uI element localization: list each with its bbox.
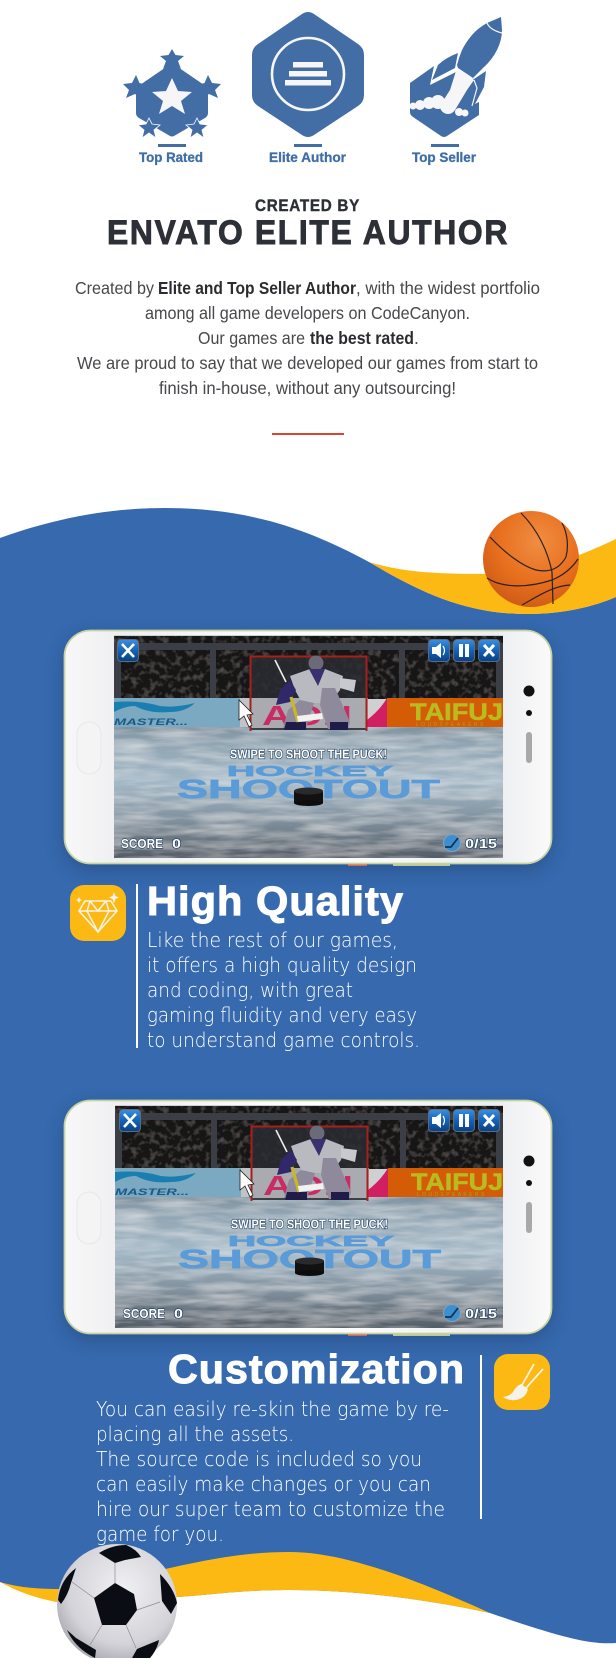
goal frame (252, 1126, 368, 1201)
close button (478, 640, 500, 662)
intro text block: Created by (75, 278, 154, 298)
badge: top seller underline (431, 144, 459, 147)
phone sensor (526, 1180, 532, 1186)
ad text master: MASTER... (114, 717, 188, 727)
phone speaker (526, 732, 532, 763)
phone shadow (64, 1106, 552, 1340)
shots count: 0/15 (465, 1307, 497, 1321)
ice surface (115, 1197, 503, 1328)
top left button (118, 640, 138, 662)
board: middle net ad (240, 698, 368, 728)
puck (295, 1258, 324, 1276)
net lower (252, 1168, 367, 1198)
shots count: 0/15 (465, 837, 497, 851)
divider: high quality (136, 884, 138, 1048)
intro text block: the best rated (310, 328, 414, 348)
board: pink stripe (367, 698, 387, 728)
badge: top rated underline (158, 144, 186, 147)
ad text taifuj: TAIFUJ (410, 699, 503, 726)
label: top seller: Top Seller (412, 150, 477, 165)
badge: top seller rocket (410, 17, 502, 137)
phone body (64, 630, 552, 864)
text: customization (96, 1397, 449, 1546)
net lower (251, 698, 366, 728)
shots icon (444, 834, 460, 852)
text: customization: The source code is included so you (96, 1447, 422, 1471)
score value: 0 (174, 1307, 183, 1321)
ice surface (114, 727, 503, 858)
board: orange ad (387, 698, 503, 728)
ad text loudspeakers: LOUDSPEAKERS (416, 722, 486, 728)
basketball (483, 511, 579, 607)
goal net (251, 657, 366, 730)
pause button (454, 640, 474, 662)
cursor (239, 700, 253, 727)
intro text block: Our games are (198, 328, 305, 348)
phone camera (524, 686, 534, 696)
ice logo hockey: HOCKEY (228, 1233, 394, 1250)
intro text block: finish in-house, without any outsourcing! (159, 378, 456, 398)
phone body (64, 1100, 552, 1334)
intro text block: , with the widest portfolio (356, 278, 540, 298)
ad logo swoosh (114, 702, 195, 712)
label: top rated: Top Rated (139, 150, 203, 165)
phone camera (524, 1156, 534, 1166)
text: high quality (147, 928, 420, 1052)
badge: elite author (252, 12, 364, 137)
ad text on net: AON (262, 700, 352, 731)
phone 2 (64, 1100, 552, 1340)
board: orange ad (388, 1168, 503, 1198)
phone speaker (526, 1202, 532, 1233)
phone shadow (64, 636, 552, 870)
ad logo swoosh (115, 1172, 196, 1182)
badges row (123, 12, 502, 165)
background: yellow wave bottom (0, 1552, 490, 1613)
pause button (454, 1110, 474, 1132)
intro text block: We are proud to say that we developed our games from start to (77, 353, 538, 373)
goal frame (250, 656, 366, 731)
text: high quality: to understand game controls. (147, 1028, 420, 1052)
text: customization: hire our super team to customize the (96, 1497, 445, 1521)
phone 1 (64, 630, 552, 870)
heading: envato elite author: ENVATO ELITE AUTHOR (107, 214, 509, 252)
icon: paint brush (494, 1354, 550, 1410)
ice logo hockey: HOCKEY (227, 763, 393, 780)
ice logo shootout: SHOOTOUT (177, 774, 440, 804)
goalie (275, 656, 356, 730)
ad text on net: AON (263, 1170, 353, 1201)
text: high quality: and coding, with great (147, 978, 353, 1002)
text: high quality: it offers a high quality design (147, 953, 417, 977)
goal net (252, 1127, 367, 1200)
text: customization: placing all the assets. (96, 1422, 294, 1446)
text: high quality: gaming fluidity and very easy (147, 1003, 417, 1027)
score: SCORE (121, 837, 163, 851)
badge: elite author underline (294, 144, 322, 147)
heading: customization: Customization (168, 1346, 465, 1392)
phone sensor (526, 710, 532, 716)
board: light blue ad (115, 1168, 243, 1198)
stands (114, 636, 503, 699)
intro text block: Elite and Top Seller Author (158, 278, 356, 298)
intro text block: . (414, 328, 419, 348)
score: SCORE (123, 1307, 165, 1321)
intro text block (75, 278, 540, 398)
score value: 0 (172, 837, 181, 851)
background: yellow wave top (369, 539, 616, 614)
background: blue wave panel (0, 508, 616, 1643)
phone colored edge marks (348, 864, 450, 866)
shots icon (444, 1304, 460, 1322)
rink beams (114, 643, 503, 698)
phone colored edge marks (348, 1334, 450, 1336)
soccer ball (57, 1544, 177, 1658)
sound button (428, 640, 450, 662)
ad text taifuj: TAIFUJ (411, 1169, 503, 1196)
top left button (120, 1110, 140, 1132)
stands (115, 1106, 503, 1169)
red divider (272, 433, 344, 435)
cursor (240, 1170, 254, 1197)
text: customization: You can easily re-skin the game by re- (96, 1397, 449, 1421)
board: light blue ad (114, 698, 242, 728)
rink beams (115, 1113, 503, 1168)
text: customization: game for you. (96, 1522, 224, 1546)
text: customization: can easily make changes or you can (96, 1472, 431, 1496)
label: elite author: Elite Author (269, 150, 347, 165)
divider: customization (480, 1355, 482, 1519)
phone home button (77, 722, 101, 774)
heading: high quality: High Quality (147, 878, 404, 924)
goalie (276, 1126, 357, 1200)
board: middle net ad (241, 1168, 369, 1198)
ad text master: MASTER... (115, 1187, 189, 1197)
board: pink stripe (368, 1168, 388, 1198)
game screen (115, 1105, 503, 1328)
ice logo shootout: SHOOTOUT (178, 1244, 441, 1274)
icon: diamond (70, 885, 126, 941)
text: high quality: Like the rest of our games, (147, 928, 398, 952)
badge: top rated (123, 49, 221, 138)
intro text block: among all game developers on CodeCanyon. (145, 303, 470, 323)
close button (478, 1110, 500, 1132)
swipe instruction: SWIPE TO SHOOT THE PUCK! (230, 748, 387, 762)
heading: created by: CREATED BY (255, 196, 360, 215)
game screen (114, 635, 503, 858)
swipe instruction: SWIPE TO SHOOT THE PUCK! (231, 1218, 388, 1232)
ad text loudspeakers: LOUDSPEAKERS (417, 1192, 487, 1198)
phone home button (77, 1192, 101, 1244)
puck (294, 788, 323, 806)
sound button (428, 1110, 450, 1132)
